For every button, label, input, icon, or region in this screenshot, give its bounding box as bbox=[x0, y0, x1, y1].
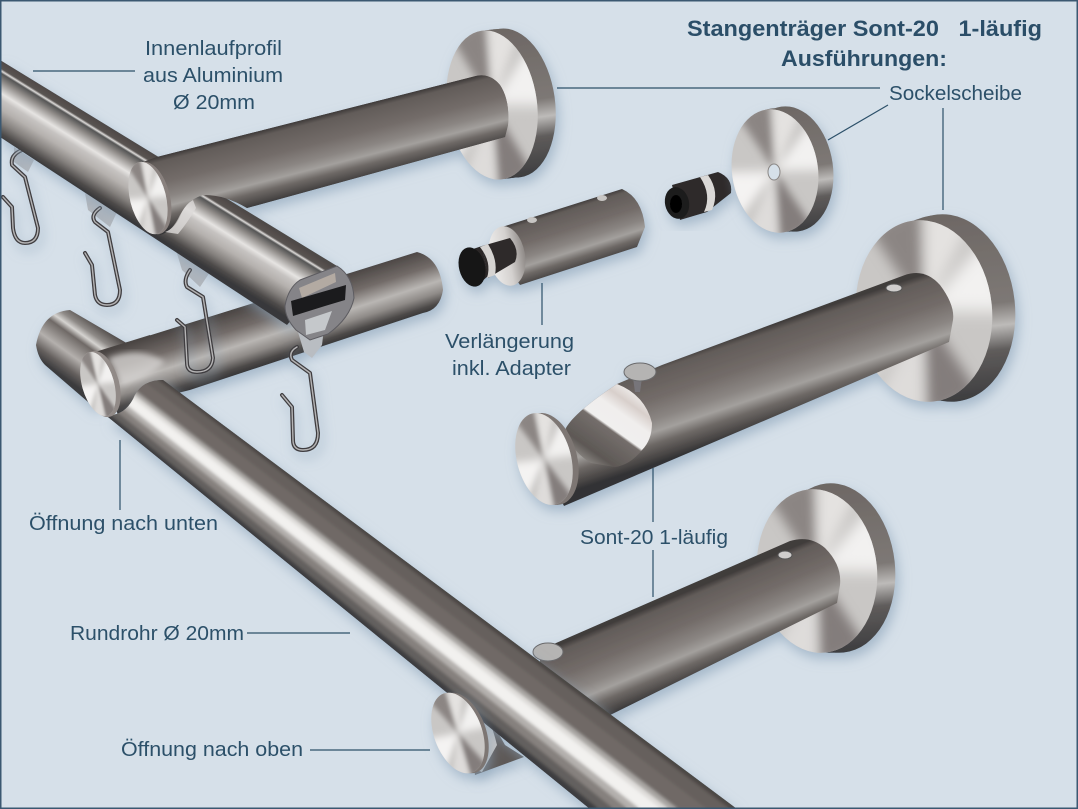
middle disc face bbox=[831, 194, 1017, 428]
bottom screw bbox=[533, 643, 563, 661]
bottom stub bbox=[462, 692, 524, 775]
label: Öffnung nach oben: Öffnung nach oben bbox=[121, 739, 303, 761]
bracket over tube bbox=[95, 335, 180, 415]
label: Sockelscheibe: Sockelscheibe bbox=[889, 83, 1022, 105]
bottom bracket bbox=[462, 466, 904, 775]
bottom disc face bbox=[735, 466, 899, 676]
label: Verlängerung bbox=[445, 331, 574, 380]
base disc bbox=[714, 90, 841, 252]
rail end profile bbox=[285, 266, 354, 358]
label: Innenlaufprofil: Ø 20mm bbox=[173, 92, 255, 114]
bottom hole bbox=[778, 551, 792, 559]
silver ring bbox=[480, 244, 496, 278]
black plug bbox=[455, 244, 489, 290]
rail sliders bbox=[14, 147, 210, 287]
label: Innenlaufprofil: Innenlaufprofil bbox=[145, 38, 282, 60]
bottom tube bbox=[540, 539, 840, 725]
middle bracket Sont-20 bbox=[498, 194, 1024, 522]
top tube over rail bbox=[140, 75, 508, 235]
label: Sont-20 1-läufig: Sont-20 1-läufig bbox=[580, 527, 728, 549]
scoop highlight bbox=[165, 200, 196, 234]
bottom cap bbox=[414, 676, 502, 790]
title bbox=[687, 16, 1042, 71]
middle hole bbox=[886, 284, 902, 292]
opening in tube bbox=[566, 384, 652, 467]
label: Innenlaufprofil bbox=[143, 38, 283, 114]
bottom disc edge bbox=[754, 477, 904, 659]
top tube bbox=[140, 75, 508, 235]
middle tube bbox=[545, 273, 953, 506]
label: Verlängerung: inkl. Adapter bbox=[452, 358, 571, 380]
extension holes bbox=[527, 217, 537, 223]
stub highlight bbox=[475, 700, 497, 772]
middle disc edge bbox=[853, 207, 1024, 409]
extension end face bbox=[484, 223, 530, 289]
bracket reflection bbox=[108, 352, 165, 385]
tube short end bbox=[36, 310, 130, 408]
long round tube bbox=[108, 380, 736, 808]
label: Innenlaufprofil: aus Aluminium bbox=[143, 65, 283, 87]
top cap bbox=[116, 150, 180, 246]
screw bbox=[624, 363, 656, 392]
extension tube bbox=[502, 189, 645, 285]
curtain hooks bbox=[3, 150, 318, 450]
top disc edge bbox=[441, 22, 565, 185]
extension hole bbox=[597, 195, 607, 201]
top disc face bbox=[426, 8, 558, 202]
lower left cap bbox=[69, 341, 128, 427]
middle cap bbox=[498, 396, 590, 522]
extension with adapter bbox=[455, 189, 645, 290]
plug body bbox=[470, 246, 488, 285]
black neck bbox=[482, 238, 517, 278]
aluminium rail bbox=[0, 60, 337, 325]
label: Verlängerung: Verlängerung bbox=[445, 331, 574, 353]
tube behind profile bbox=[103, 252, 443, 400]
title: Ausführungen: bbox=[781, 46, 947, 71]
label: Rundrohr: Rundrohr Ø 20mm bbox=[70, 623, 244, 645]
title: Stangenträger Sont-20 1-läufig bbox=[687, 16, 1042, 41]
small coupling bbox=[662, 172, 731, 221]
leader lines bbox=[33, 71, 943, 750]
label: Öffnung nach unten: Öffnung nach unten bbox=[29, 513, 218, 535]
top bracket bbox=[140, 8, 565, 235]
